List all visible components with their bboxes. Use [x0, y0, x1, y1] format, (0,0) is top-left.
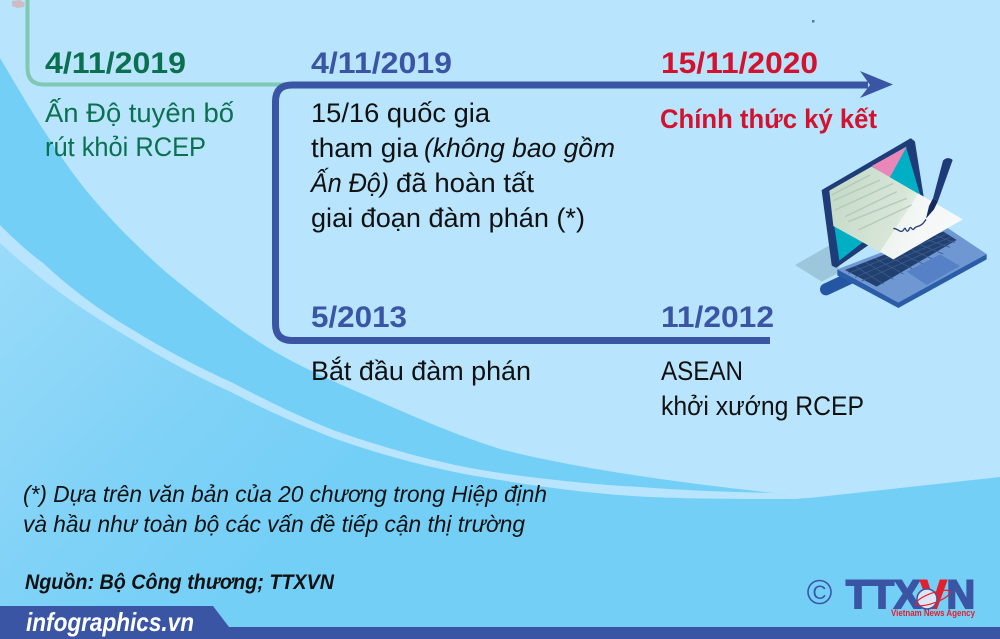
- copyright symbol: [808, 580, 831, 604]
- milestone: India withdraws: rút khỏi RCEP: [45, 132, 206, 162]
- milestone: ASEAN initiates RCEP: [661, 301, 864, 421]
- milestone: negotiations concluded: Ấn Độ): [309, 167, 389, 198]
- blue timeline path with arrow: [276, 71, 893, 340]
- milestone: ASEAN initiates RCEP: khởi xướng RCEP: [661, 391, 864, 421]
- milestone: negotiations start: 5/2013: [311, 301, 407, 334]
- footer bar with website: infographics.vn: [26, 607, 194, 637]
- milestone: negotiations start: Bắt đầu đàm phán: [311, 355, 531, 386]
- milestone: negotiations concluded: (không bao gồm: [424, 133, 615, 163]
- milestone: negotiations concluded: tham gia: [311, 133, 419, 163]
- milestone: ASEAN initiates RCEP: 11/2012: [661, 301, 774, 334]
- milestone: negotiations start: [311, 301, 531, 386]
- milestone: officially signed: Chính thức ký kết: [660, 104, 877, 134]
- milestone: negotiations concluded: 15/16 quốc gia: [311, 98, 491, 128]
- footer bar with website: [0, 606, 1000, 639]
- source: Nguồn: Bộ Công thương; TTXVN: [25, 571, 335, 594]
- milestone: officially signed: 15/11/2020: [661, 47, 818, 80]
- copyright symbol: C: [813, 583, 826, 604]
- milestone: India withdraws: [45, 47, 234, 162]
- footnote: [23, 481, 547, 537]
- logo: TTXVN Vietnam News Agency: TTXVN: [846, 573, 975, 617]
- milestone: officially signed: [660, 47, 877, 134]
- milestone: negotiations concluded: đã hoàn tất: [396, 168, 535, 198]
- milestone: negotiations concluded: 4/11/2019: [311, 47, 452, 80]
- milestone: negotiations concluded: [309, 47, 615, 233]
- footnote: (*) Dựa trên văn bản của 20 chương trong Hiệp định: [23, 481, 547, 507]
- milestone: ASEAN initiates RCEP: ASEAN: [661, 356, 743, 386]
- milestone: India withdraws: 4/11/2019: [45, 47, 186, 80]
- green timeline connector: [28, 0, 285, 84]
- logo: TTXVN Vietnam News Agency: Vietnam News Agency: [891, 608, 976, 619]
- milestone: negotiations concluded: giai đoạn đàm phán (*): [311, 203, 585, 233]
- milestone: India withdraws: Ấn Độ tuyên bố: [45, 97, 234, 128]
- icon: laptop with signed document: [795, 139, 987, 308]
- footnote: và hầu như toàn bộ các vấn đề tiếp cận thị trường: [23, 511, 525, 537]
